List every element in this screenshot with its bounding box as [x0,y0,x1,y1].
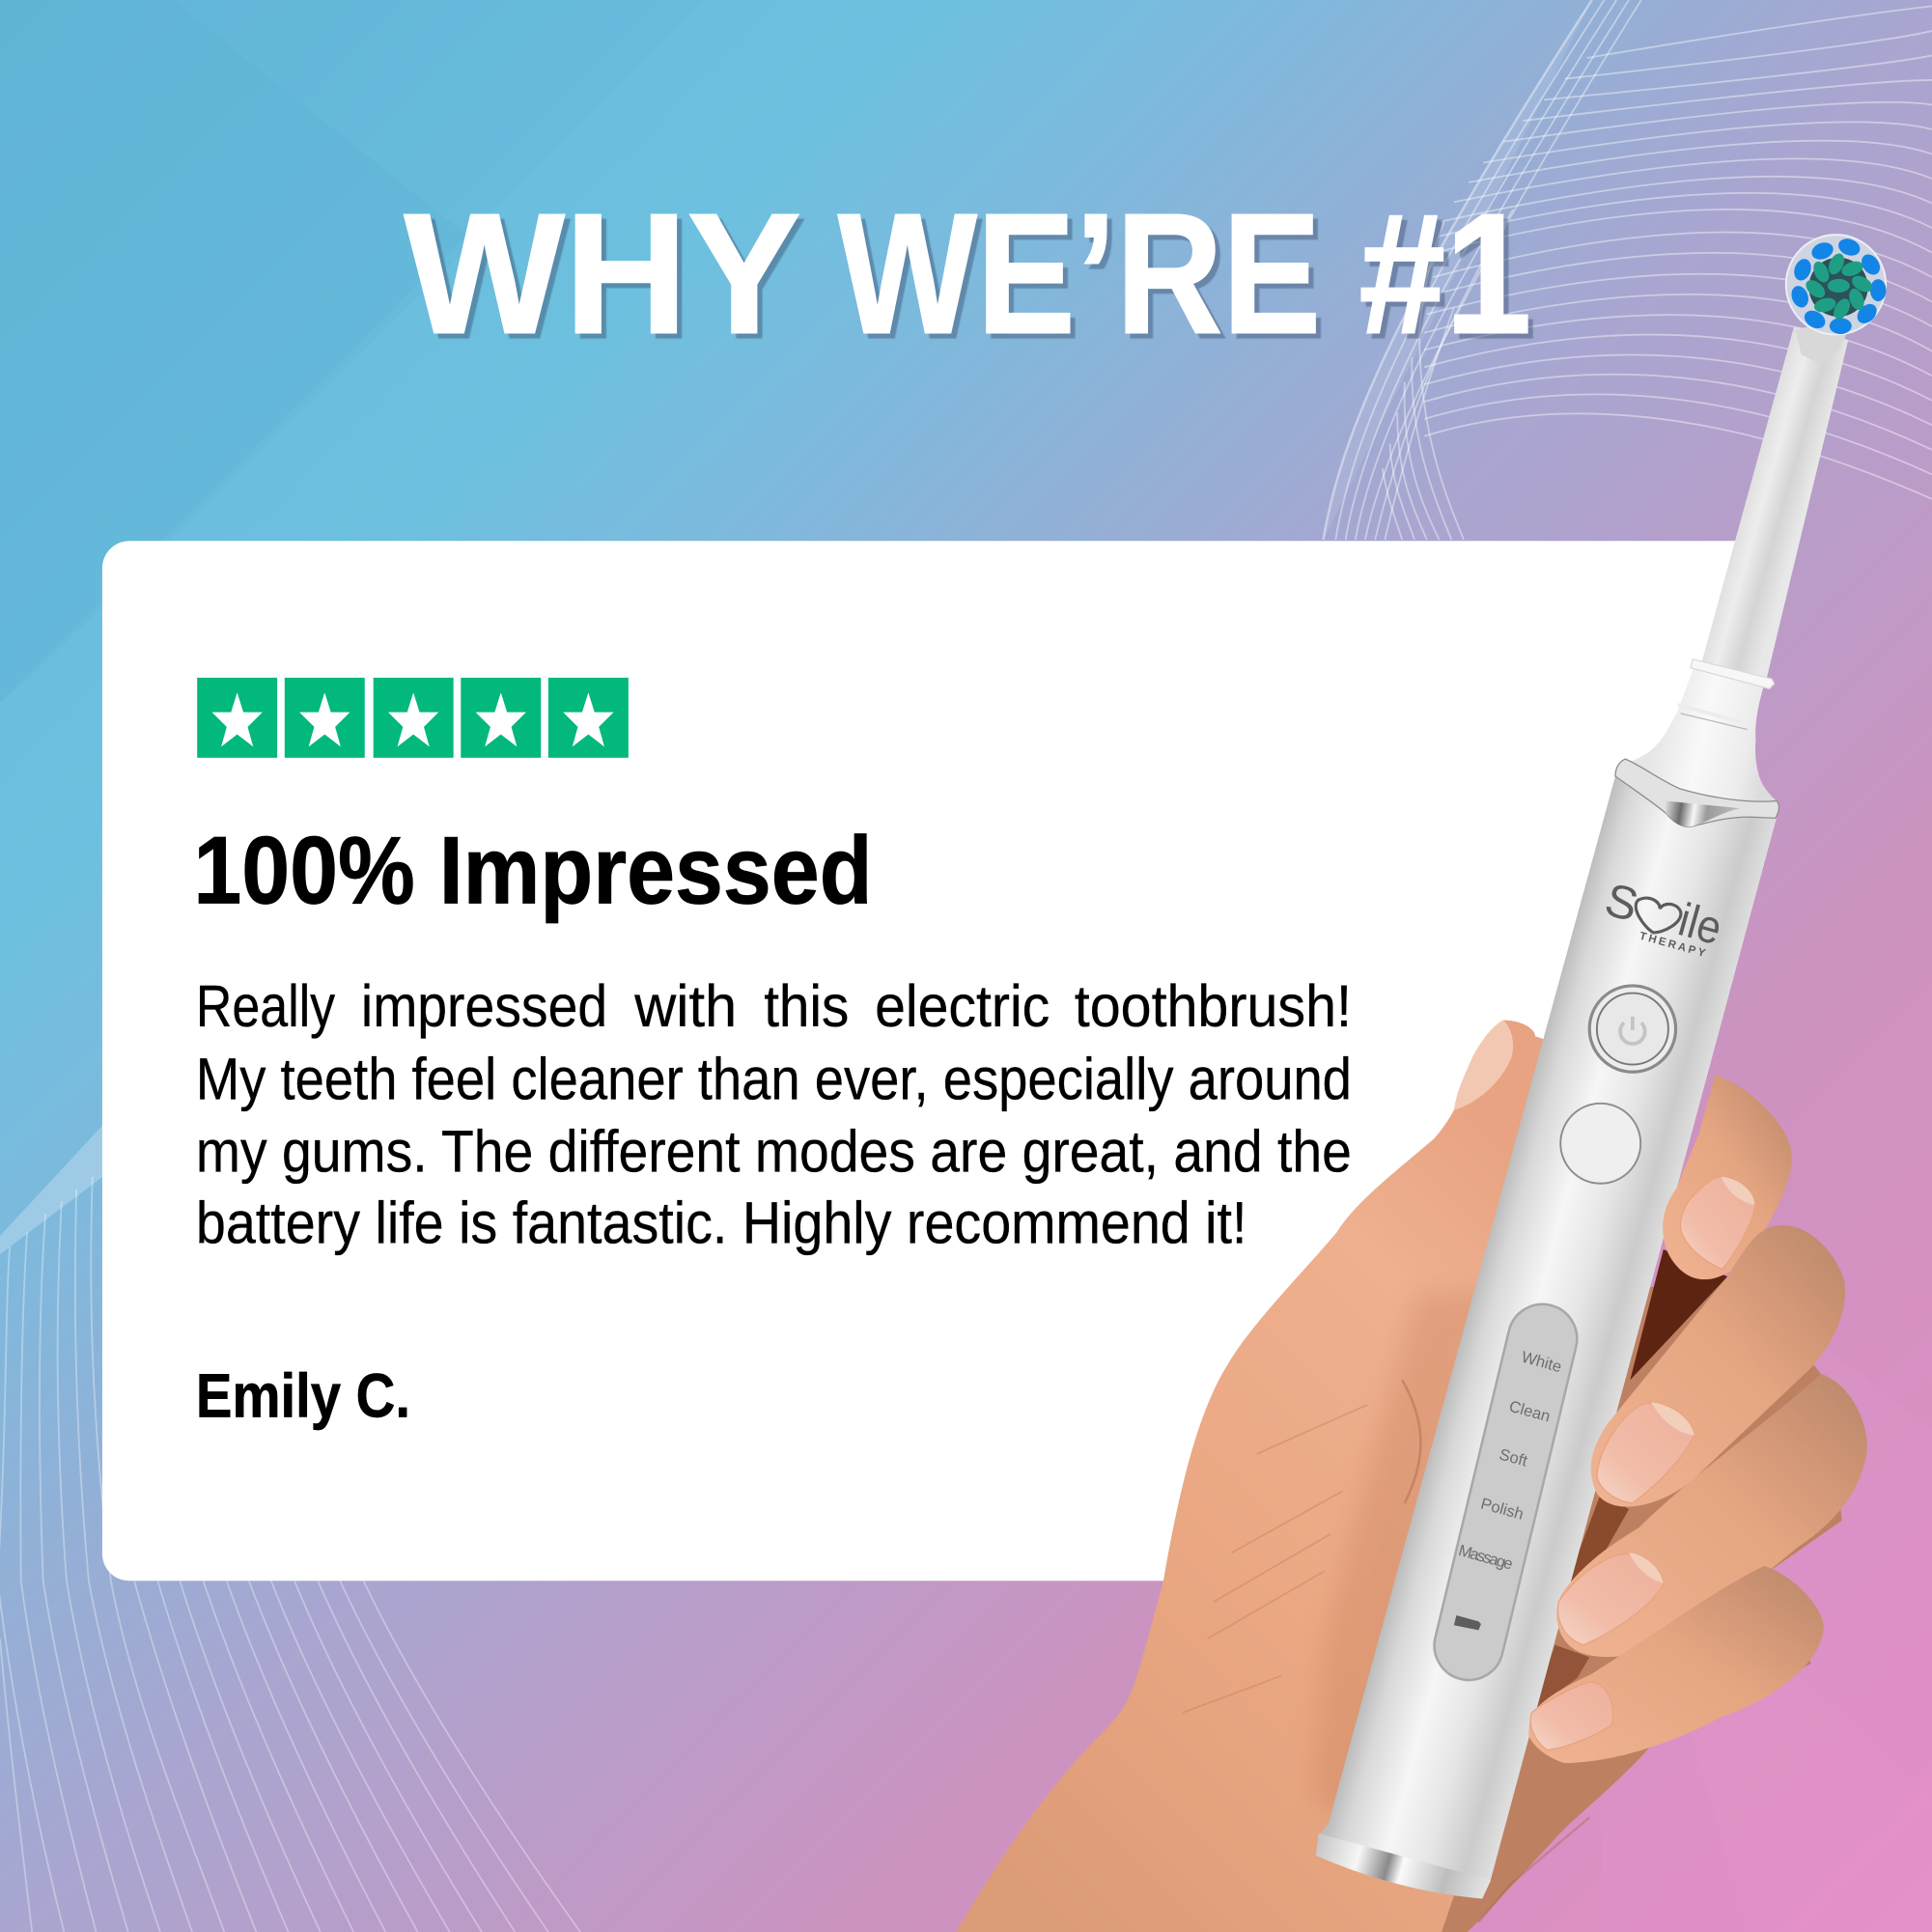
brush logo: ile [1673,894,1727,955]
review text: with [633,973,737,1039]
review text: toothbrush! [1075,973,1352,1039]
title: WE’RE [838,178,1321,370]
metallic collar [1615,759,1778,826]
finger: little [1528,1566,1824,1763]
hand: palm and wrist [956,1021,1842,1932]
mode panel: Soft [1498,1444,1530,1470]
mode panel: White [1520,1348,1564,1376]
review text: My teeth feel cleaner than ever, especially around [196,1046,1352,1111]
brush head [1786,235,1887,334]
reviewer name: Emily C. [196,1361,410,1431]
review text: Really [196,973,335,1039]
finger: ring [1556,1374,1867,1657]
metallic base band [1316,1834,1491,1899]
hand: fingers [1528,1075,1867,1763]
mode panel: Clean [1507,1397,1553,1426]
thumb nail [1454,1021,1513,1110]
brush logo [1598,874,1727,962]
finger: middle [1591,1225,1845,1506]
review text: electric [875,973,1050,1039]
title: WHY [405,178,800,370]
review text: this [764,973,849,1039]
icon: battery [1454,1615,1481,1630]
background line pattern: bottom left [0,1116,580,1932]
power button [1589,986,1676,1072]
brush logo: THERAPY [1638,931,1709,961]
panel: review card [102,541,1744,1581]
background line pattern: top right [1324,0,1932,540]
finger: index [1663,1075,1792,1279]
icon: five star rating [197,678,629,758]
review text [196,973,1352,1256]
review text: impressed [361,973,607,1039]
review text: battery life is fantastic. Highly recommend it! [196,1190,1246,1256]
toothbrush [1316,235,1887,1899]
brush handle [1316,776,1777,1897]
second button [1560,1104,1640,1184]
mode panel: Polish [1479,1495,1526,1524]
title: #1 [1359,178,1531,370]
mode panel [1427,1297,1584,1687]
brush shaft and neck [1625,322,1848,818]
mode panel: Massage [1457,1541,1515,1574]
heading: 100% Impressed: 100% Impressed [193,817,873,924]
brush logo: S [1600,874,1643,932]
review text: my gums. The different modes are great, and the [196,1119,1352,1185]
